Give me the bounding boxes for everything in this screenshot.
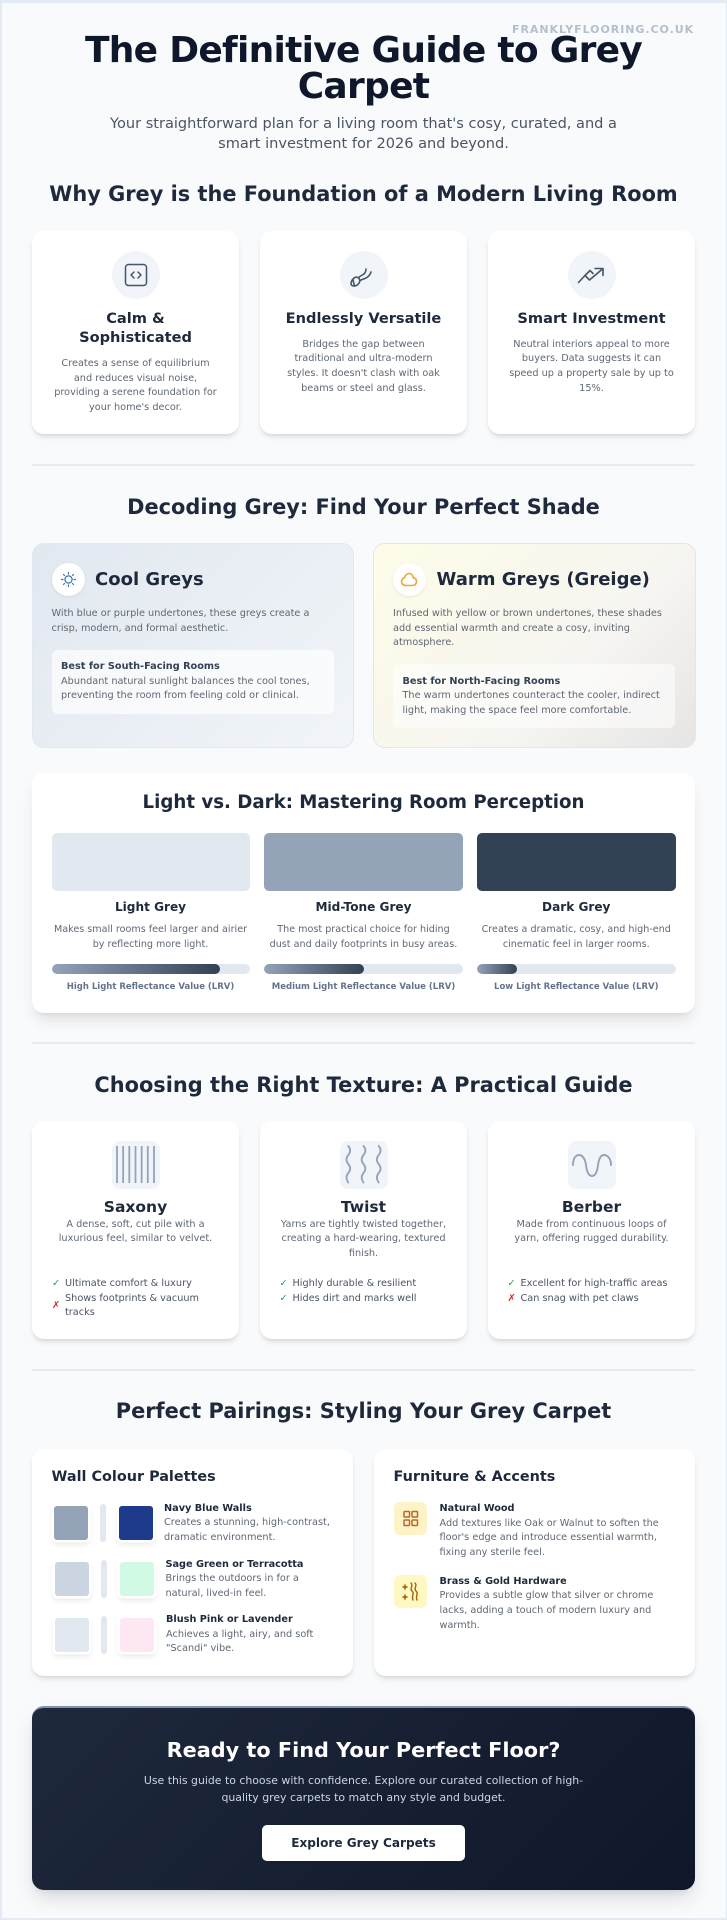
icon: twist waves <box>340 1141 388 1189</box>
divider pill <box>100 1616 106 1654</box>
swatch: light grey <box>52 833 250 891</box>
panel: call to action <box>32 1706 695 1890</box>
text: dark grey: Creates a dramatic, cosy, and high-end <box>482 924 671 935</box>
accent: brass and gold <box>394 1575 653 1631</box>
text: light grey <box>54 924 248 950</box>
palette text: "Scandi" vibe. <box>166 1643 234 1654</box>
pros and cons: Hides dirt and marks well <box>292 1293 416 1304</box>
panel: saxony <box>32 1121 239 1339</box>
icon: brass sparkle <box>394 1574 427 1608</box>
swatch: base <box>54 1506 88 1540</box>
card title <box>79 310 192 346</box>
mark: ticks <box>280 1278 288 1304</box>
icon: sun <box>52 563 84 596</box>
accent text: Add textures like Oak or Walnut to soften the <box>440 1518 659 1529</box>
pros and cons <box>65 1278 199 1318</box>
texture text: A dense, soft, cut pile with a <box>66 1218 205 1230</box>
card text: Bridges the gap between <box>302 338 425 350</box>
panel: wall colour palettes <box>32 1448 353 1676</box>
texture text: Yarns are tightly twisted together, <box>281 1218 446 1230</box>
bar: low LRV <box>477 964 676 974</box>
call to action text: quality grey carpets to match any style and budget. <box>221 1791 506 1804</box>
card text: and reduces visual noise, <box>74 373 197 384</box>
palette text <box>166 1558 303 1599</box>
pros and cons: Shows footprints & vacuum <box>65 1293 199 1304</box>
icon: wood grid <box>394 1502 427 1535</box>
panel title: Cool Greys <box>95 569 204 590</box>
recommendation text: The warm undertones counteract the cooler, indirect <box>402 690 660 701</box>
recommendation text: Best for South-Facing Rooms <box>61 661 220 672</box>
heading: texture: Choosing the Right Texture: A Practical Guide <box>94 1072 633 1096</box>
call to action title: Ready to Find Your Perfect Floor? <box>167 1738 560 1762</box>
accent text: floor's edge and introduce essential warmth, <box>440 1532 657 1543</box>
palette text: Sage Green or Terracotta <box>166 1558 303 1570</box>
panel text <box>393 608 662 648</box>
swatch: blush <box>120 1618 154 1652</box>
card title: Calm & <box>106 310 165 326</box>
palette text: Navy Blue Walls <box>164 1502 252 1514</box>
pros and cons: Can snag with pet claws <box>520 1293 639 1304</box>
panel: cool greys <box>32 543 354 748</box>
accent text: fixing any sterile feel. <box>440 1547 545 1558</box>
swatch: navy <box>118 1506 152 1540</box>
palette text: natural, lived-in feel. <box>166 1588 266 1599</box>
recommendation box <box>393 664 675 728</box>
card text <box>54 358 217 413</box>
palette text <box>164 1502 330 1543</box>
heading: why grey: Why Grey is the Foundation of a Modern Living Room <box>49 182 678 206</box>
call to action text: Use this guide to choose with confidence. Explore our curated collection of high- <box>144 1774 583 1787</box>
pros and cons: tracks <box>65 1307 95 1318</box>
texture name: Berber <box>562 1198 621 1216</box>
texture text: luxurious feel, similar to velvet. <box>59 1233 212 1244</box>
panel text: With blue or purple undertones, these greys create a <box>52 608 309 619</box>
accent text <box>440 1576 653 1631</box>
mark: tick: ✓ <box>508 1278 516 1289</box>
text: mid grey <box>270 924 457 950</box>
recommendation box <box>52 650 334 714</box>
recommendation text <box>61 661 310 701</box>
subtitle <box>110 115 617 152</box>
card text: styles. It doesn't clash with oak <box>287 368 440 379</box>
bar label: low: Low Light Reflectance Value (LRV) <box>494 982 658 992</box>
accent text: warmth. <box>440 1620 480 1631</box>
panel text: atmosphere. <box>393 637 454 648</box>
panel: endlessly versatile <box>260 231 467 434</box>
card text: 15%. <box>579 383 604 394</box>
text: dark grey: cinematic feel in larger rooms. <box>503 939 650 950</box>
texture text <box>59 1218 212 1244</box>
palette text: Creates a stunning, high-contrast, <box>164 1517 330 1528</box>
text: light grey: by reflecting more light. <box>93 939 208 950</box>
divider pill <box>100 1560 106 1598</box>
texture text: creating a hard-wearing, textured <box>281 1233 446 1244</box>
watermark: website name: FRANKLYFLOORING.CO.UK <box>512 23 694 36</box>
recommendation text <box>402 676 660 716</box>
bar label: medium: Medium Light Reflectance Value (LRV) <box>272 982 455 992</box>
accent text: Brass & Gold Hardware <box>440 1576 567 1586</box>
panel: berber <box>488 1121 695 1339</box>
card text: Creates a sense of equilibrium <box>61 358 210 369</box>
card text <box>509 338 674 394</box>
texture name: Saxony <box>104 1198 167 1216</box>
text: mid grey: The most practical choice for hiding <box>277 924 450 935</box>
panel text <box>52 608 309 634</box>
card title: Endlessly Versatile <box>286 310 441 326</box>
panel: furniture and accents <box>374 1448 695 1676</box>
palette: blush <box>53 1614 314 1658</box>
pros and cons: Ultimate comfort & luxury <box>65 1278 192 1289</box>
text: mid grey: dust and daily footprints in busy areas. <box>270 939 457 950</box>
icon: versatile <box>340 251 388 299</box>
label: dark grey: Dark Grey <box>542 900 610 914</box>
title <box>85 30 642 106</box>
card text: buyers. Data suggests it can <box>522 353 661 364</box>
texture name: Twist <box>341 1198 386 1216</box>
panel title: Warm Greys (Greige) <box>436 569 650 590</box>
card text: speed up a property sale by up to <box>509 368 674 379</box>
panel text: Infused with yellow or brown undertones, these shades <box>393 608 662 619</box>
icon: calm <box>112 251 160 299</box>
mark: cross: ✗ <box>508 1292 516 1304</box>
recommendation text: preventing the room from feeling cold or clinical. <box>61 690 299 701</box>
swatch: sage <box>120 1562 154 1596</box>
accent: natural wood <box>394 1502 659 1558</box>
text: dark grey <box>482 924 671 950</box>
bar: medium LRV <box>264 964 463 974</box>
accent text: Provides a subtle glow that silver or chrome <box>440 1590 653 1601</box>
card text: traditional and ultra-modern <box>294 353 433 364</box>
panel text: crisp, modern, and formal aesthetic. <box>52 623 228 634</box>
pros and cons <box>292 1278 416 1304</box>
bar: high LRV <box>52 964 250 974</box>
card text: your home's decor. <box>89 402 182 413</box>
mark: ticks: ✓ <box>280 1278 288 1289</box>
texture text: finish. <box>349 1248 378 1259</box>
panel: smart investment <box>488 231 695 434</box>
palette text: dramatic environment. <box>164 1532 275 1543</box>
mark: ticks: ✓ <box>280 1293 288 1304</box>
card text: Neutral interiors appeal to more <box>513 338 670 350</box>
swatch: mid grey <box>264 833 463 891</box>
palette text: Blush Pink or Lavender <box>166 1614 293 1625</box>
subtitle: Your straightforward plan for a living room that's cosy, curated, and a <box>110 115 617 132</box>
palette text: Brings the outdoors in for a <box>166 1573 299 1584</box>
icon: saxony lines <box>112 1141 160 1189</box>
palette: navy <box>52 1502 330 1546</box>
accent text: lacks, adding a touch of modern luxury and <box>440 1605 651 1616</box>
pros and cons <box>520 1278 667 1304</box>
card text: beams or steel and glass. <box>301 383 426 394</box>
panel title: Furniture & Accents <box>394 1469 555 1485</box>
recommendation text: light, making the space feel more comfortable. <box>402 705 631 716</box>
pros and cons: Highly durable & resilient <box>292 1278 416 1289</box>
accent text <box>440 1503 659 1558</box>
swatch: base <box>54 1618 88 1652</box>
texture text <box>280 1218 446 1259</box>
button: Explore Grey Carpets <box>291 1836 436 1850</box>
card text: providing a serene foundation for <box>54 387 217 398</box>
icon: berber loop <box>568 1141 616 1189</box>
recommendation text: Best for North-Facing Rooms <box>402 676 560 686</box>
card title: Sophisticated <box>79 329 192 346</box>
panel: warm greys <box>373 543 696 748</box>
title: Carpet <box>298 66 429 106</box>
palette text <box>166 1614 314 1654</box>
bar label: high: High Light Reflectance Value (LRV) <box>67 982 234 992</box>
subtitle: smart investment for 2026 and beyond. <box>218 135 509 152</box>
accent text: Natural Wood <box>440 1503 515 1514</box>
mark: tick: ✓ <box>52 1278 60 1289</box>
swatch: dark grey <box>477 833 676 891</box>
swatch: base <box>54 1562 88 1596</box>
heading: light vs dark: Light vs. Dark: Mastering Room Perception <box>143 792 584 812</box>
card text <box>287 338 440 394</box>
pros and cons: Excellent for high-traffic areas <box>520 1278 667 1289</box>
card title: Smart Investment <box>517 310 666 326</box>
mark: cross: ✗ <box>52 1300 60 1311</box>
icon: cloud <box>393 563 426 596</box>
label: light grey: Light Grey <box>115 900 186 914</box>
panel: light vs dark <box>32 772 695 1012</box>
heading: pairings: Perfect Pairings: Styling Your Grey Carpet <box>116 1399 611 1423</box>
recommendation text: Abundant natural sunlight balances the cool tones, <box>61 676 310 687</box>
label: mid grey: Mid-Tone Grey <box>315 900 412 914</box>
button <box>262 1824 465 1861</box>
panel text: add essential warmth and create a cosy, inviting <box>393 623 630 634</box>
panel title: Wall Colour Palettes <box>52 1469 216 1485</box>
text: light grey: Makes small rooms feel larger and airier <box>54 924 247 935</box>
panel: twist <box>260 1121 467 1339</box>
palette text: Achieves a light, airy, and soft <box>166 1629 313 1640</box>
texture text: yarn, offering rugged durability. <box>514 1233 669 1244</box>
heading: decoding grey: Decoding Grey: Find Your Perfect Shade <box>127 494 600 518</box>
palette: sage <box>53 1558 303 1602</box>
call to action text <box>144 1774 583 1804</box>
texture text: Made from continuous loops of <box>516 1218 667 1230</box>
divider pill <box>100 1504 106 1542</box>
panel: calm and sophisticated <box>32 231 239 434</box>
icon: trend <box>568 251 616 299</box>
texture text <box>514 1218 669 1244</box>
title: The Definitive Guide to Grey <box>85 30 642 70</box>
